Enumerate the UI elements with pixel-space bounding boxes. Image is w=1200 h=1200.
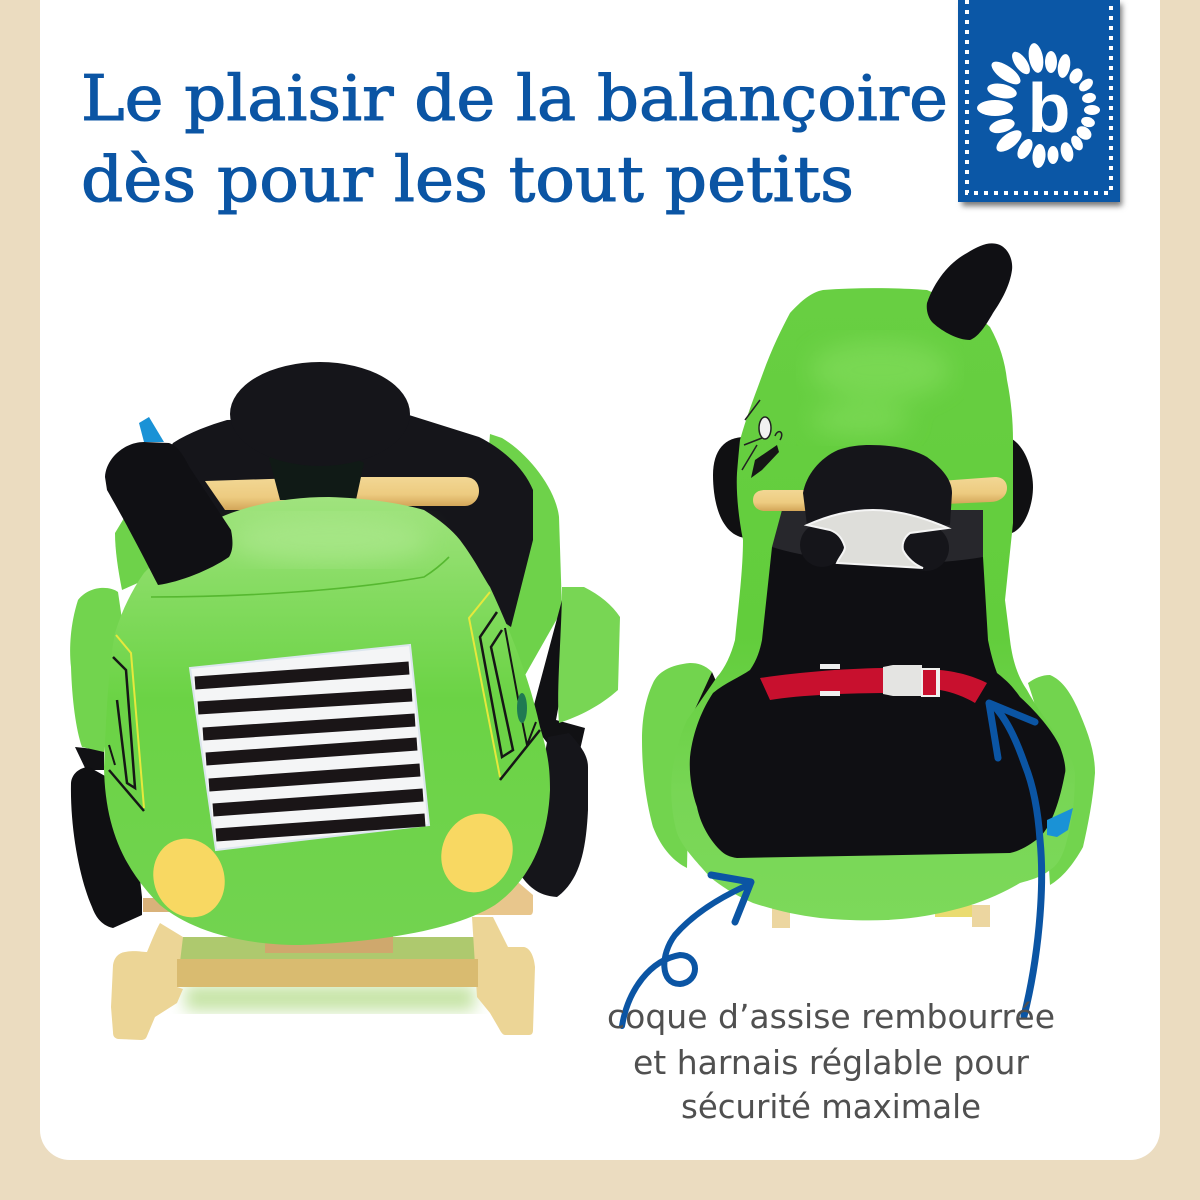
title — [81, 62, 948, 216]
arrow: to seat — [622, 875, 751, 1026]
left fender — [70, 588, 125, 752]
inner black seat — [690, 547, 1065, 858]
left wheel — [71, 767, 142, 928]
exhaust pipe — [927, 243, 1012, 340]
right wheel support — [530, 600, 585, 760]
hood seam — [151, 557, 449, 597]
rocker shadow — [185, 985, 475, 1011]
icon: flower petals — [977, 42, 1100, 169]
wooden rocker base — [111, 877, 535, 1040]
seat back black — [130, 415, 533, 627]
red harness — [760, 668, 890, 700]
handle bar left — [753, 490, 810, 511]
right armrest — [1028, 675, 1095, 885]
left wheel support — [75, 747, 104, 770]
arrow: to harness — [989, 703, 1042, 1016]
title: dès pour les tout petits — [81, 143, 854, 216]
caption text: coque d’assise rembourrée — [607, 997, 1055, 1036]
caption text: sécurité maximale — [681, 1087, 981, 1126]
embroidery — [742, 400, 782, 478]
small black wheels behind arms — [690, 672, 720, 725]
title: Le plaisir de la balançoire — [81, 62, 948, 135]
hood light patch — [230, 516, 430, 564]
side wheels — [713, 437, 745, 538]
steering column — [269, 453, 364, 500]
logo badge: b — [1028, 69, 1070, 147]
upper seat band — [772, 510, 983, 563]
headlights — [142, 828, 236, 928]
right wheel — [522, 733, 588, 897]
hood body — [104, 497, 550, 945]
left side panel vents — [109, 635, 144, 811]
handle bar right — [940, 477, 1007, 504]
logo badge — [958, 0, 1122, 206]
light patches — [810, 340, 950, 436]
illustration: tractor rocker front view — [70, 362, 620, 1040]
wooden feet — [772, 905, 790, 928]
illustration: tractor rocker seat view — [642, 243, 1095, 928]
white patch — [807, 510, 948, 568]
caption text — [607, 997, 1055, 1126]
blue tag — [1047, 808, 1073, 837]
steering wheel back — [800, 445, 952, 571]
blue tag — [139, 417, 164, 442]
right side panel vents — [469, 592, 540, 780]
caption text: et harnais réglable pour — [633, 1043, 1029, 1082]
green seat side — [480, 434, 562, 700]
grille — [190, 645, 429, 850]
buckle — [820, 664, 940, 697]
exhaust — [105, 442, 232, 585]
right fender — [558, 587, 620, 723]
seat shell — [671, 288, 1075, 920]
left armrest — [642, 663, 712, 868]
wooden handle — [205, 478, 300, 510]
steering wheel — [230, 362, 410, 466]
